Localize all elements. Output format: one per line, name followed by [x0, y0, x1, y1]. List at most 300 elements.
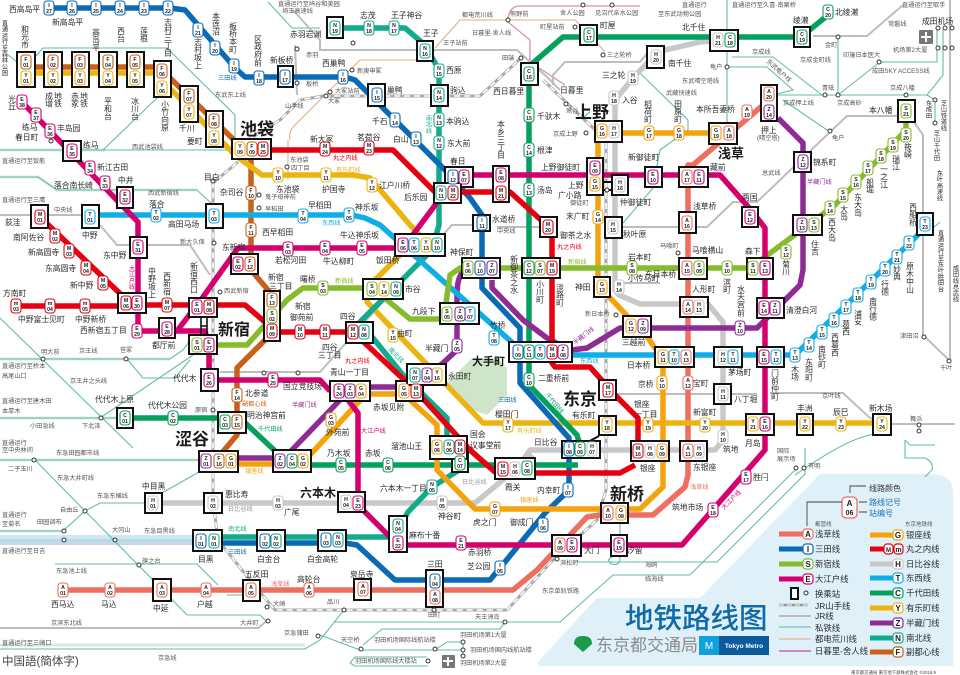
- small labels: railways and through services: 至中央林间: [2, 446, 33, 454]
- stations: Asakusa line: A: [685, 263, 689, 269]
- stations: Ginza line: 19: [713, 134, 719, 140]
- small labels: railways and through services: 四丁目: [291, 165, 310, 172]
- stations: Fukutoshin line: F: [249, 188, 253, 194]
- station labels: horizontal: 三之轮: [602, 70, 626, 80]
- stations: Tozai line: 05: [346, 216, 352, 222]
- small labels: railways and through services: 都电荒川线: [462, 11, 493, 19]
- station labels: vertical: 芝山铁道线: [940, 99, 947, 131]
- stations: Yurakucho line: 01: [23, 79, 29, 85]
- stations: Fukutoshin line: F: [160, 66, 164, 72]
- stations: Yurakucho line: 23: [838, 425, 844, 431]
- stations: Namboku line: N: [362, 327, 366, 333]
- station labels: horizontal: 东大前: [447, 138, 471, 148]
- stations: Chiyoda line: 17: [586, 36, 592, 42]
- station labels: horizontal: 北千住: [682, 22, 706, 32]
- stations: Fukutoshin line: F: [249, 225, 253, 231]
- stations: Namboku line: N: [437, 90, 441, 96]
- small labels: railways and through services: 莺谷: [566, 107, 578, 115]
- station labels: horizontal: 北绫濑: [835, 7, 859, 17]
- station labels: horizontal: 新宿: [295, 301, 311, 311]
- station labels: horizontal: 清澄白河: [786, 305, 817, 315]
- stations: Namboku line: N: [396, 521, 400, 527]
- stations: Asakusa line: A: [685, 218, 689, 224]
- small labels: railways and through services: 鬼子母神前: [265, 193, 296, 201]
- legend key labels: 东京地铁线: [905, 520, 933, 528]
- stations: Marunouchi line: m: [48, 301, 53, 307]
- stations: Namboku line: N: [439, 188, 443, 194]
- stations: Chiyoda line: C: [527, 263, 531, 269]
- stations: Asakusa line: A: [108, 585, 112, 591]
- small labels: railways and through services: 京成八幡: [890, 84, 915, 92]
- station labels: horizontal: 町屋: [600, 21, 616, 30]
- stations: Tozai line: T: [807, 340, 811, 346]
- small labels: railways and through services: 大江户线: [720, 488, 743, 511]
- stations: Tozai line: 17: [843, 308, 849, 314]
- stations: Tozai line: T: [883, 264, 887, 270]
- stations: Tozai line: 18: [855, 296, 861, 302]
- stations: Oedo line: 12: [747, 218, 753, 224]
- small labels: railways and through services: 大崎: [273, 600, 285, 608]
- stations: Mita line: I: [95, 3, 97, 9]
- stations: Shinjuku line: S: [697, 263, 701, 269]
- stations: Ginza line: 17: [646, 134, 652, 140]
- small labels: railways and through services: 东京单轨铁路: [542, 587, 580, 595]
- station labels: horizontal: 御茶之水: [560, 230, 591, 240]
- stations: Oedo line: 02: [235, 265, 241, 271]
- stations: Marunouchi line: 04: [83, 269, 89, 275]
- stations: Ginza line: 06: [434, 448, 440, 454]
- small labels: railways and through services: 银座线: [520, 496, 539, 504]
- station labels: vertical: 地铁: [79, 91, 88, 109]
- station labels: horizontal: 新高圆寺: [28, 247, 59, 257]
- small labels: railways and through services: 西武池袋线: [132, 143, 163, 151]
- stations: Fukutoshin line: 04: [105, 63, 111, 69]
- stations: Oedo line: 15: [761, 358, 767, 364]
- station labels: horizontal: 银座: [634, 399, 650, 409]
- legend letter badges: S: [805, 560, 811, 569]
- stations: Fukutoshin line: 16: [216, 462, 222, 468]
- station labels: horizontal: 白金高轮: [307, 554, 338, 564]
- stations: Fukutoshin line: 10: [248, 194, 254, 200]
- station labels: horizontal: 日本桥: [627, 360, 651, 370]
- stations: Yurakucho line: 09: [237, 150, 243, 156]
- stations: Namboku line: N: [437, 66, 441, 72]
- station labels: horizontal: 水道桥: [492, 214, 516, 224]
- station labels: horizontal: 四谷: [340, 312, 356, 321]
- stations: Mita line: I: [214, 43, 216, 49]
- station labels: horizontal: 杂司谷: [220, 188, 244, 197]
- station labels: vertical: 稻荷町: [643, 99, 652, 123]
- stations: Fukutoshin line: F: [106, 57, 110, 63]
- stations: Yurakucho line: Y: [803, 419, 807, 425]
- stations: Ginza line: G: [329, 415, 333, 421]
- stations: Tozai line: 19: [868, 283, 874, 289]
- small labels: railways and through services: 直通运行至饭能: [2, 157, 45, 165]
- stations: Mita line: I: [48, 3, 50, 9]
- station labels: vertical: 志村三丁目: [163, 17, 172, 58]
- stations: Oedo line: E: [135, 298, 139, 304]
- station labels: vertical: 东阳町: [804, 357, 814, 381]
- stations: Mita line: 09: [515, 353, 521, 359]
- stations: Tozai line: T: [907, 238, 911, 244]
- stations: Asakusa line: A: [767, 89, 771, 95]
- station labels: horizontal: 中井: [118, 175, 134, 185]
- stations: Hanzomon line: Z: [425, 370, 429, 376]
- stations: Tozai line: T: [820, 327, 824, 333]
- icon: airport north: [919, 30, 933, 44]
- station labels: horizontal: 中延: [153, 603, 169, 613]
- stations: Marunouchi line: M: [270, 326, 274, 332]
- stations: Tozai line: 14: [806, 346, 812, 352]
- stations: Asakusa line: 09: [557, 546, 563, 552]
- stations: Oedo line: 17: [743, 478, 749, 484]
- stations: Chiyoda line: 03: [222, 423, 228, 429]
- stations: Asakusa line: A: [686, 302, 690, 308]
- stations: Ginza line: 09: [659, 452, 665, 458]
- stations: Chiyoda line: 07: [457, 464, 463, 470]
- station labels: horizontal: 森下: [745, 246, 761, 256]
- stations: Mita line: 02: [262, 542, 268, 548]
- stations: Hanzomon line: 02: [277, 462, 283, 468]
- stations: Fukutoshin line: [21, 55, 277, 468]
- station labels: horizontal: 王子神谷: [391, 10, 422, 20]
- station labels: horizontal: 都厅前: [152, 340, 176, 350]
- station labels: horizontal: 外苑前: [326, 427, 350, 437]
- legend swatches: [779, 534, 895, 652]
- station labels: horizontal: 西马込: [51, 600, 75, 609]
- station labels: vertical: 船堀: [865, 177, 874, 195]
- stations: Ginza line: G: [301, 456, 305, 462]
- subway line: Shinjuku: [217, 110, 906, 345]
- stations: Fukutoshin line: F: [24, 57, 28, 63]
- small labels: railways and through services: 直通运行至桥本: [2, 362, 45, 370]
- stations: Mita line: 16: [340, 78, 346, 84]
- stations: Hibiya line: 21: [715, 41, 721, 47]
- small labels: railways and through services: 武藏快速线: [666, 89, 697, 97]
- stations: Chiyoda line: C: [527, 110, 531, 116]
- small labels: railways and through services: 直通运行至三崎口: [2, 639, 52, 647]
- station labels: vertical: 赤冢: [70, 92, 80, 108]
- stations: Oedo line: 20: [569, 546, 575, 552]
- small labels: railways and through services: (晴空塔): [757, 134, 780, 142]
- station labels: horizontal: 虎之门: [473, 517, 497, 527]
- legend line names: 有乐町线: [906, 603, 940, 613]
- stations: Oedo line: 38: [19, 103, 25, 109]
- stations: Ginza line: 18: [676, 134, 682, 140]
- stations: Marunouchi line: M: [84, 263, 88, 269]
- station labels: vertical: 南行德: [868, 296, 878, 321]
- station labels: horizontal: 高轮台: [297, 574, 321, 584]
- stations: Hibiya line: [148, 33, 728, 510]
- stations: Shinjuku line: 05: [444, 315, 450, 321]
- stations: Asakusa line: 15: [684, 269, 690, 275]
- small labels: railways and through services: 板桥: [306, 80, 318, 88]
- stations: Hibiya line: 17: [611, 132, 617, 138]
- stations: Tozai line: T: [412, 240, 416, 246]
- station labels: horizontal: 江户川桥: [379, 180, 410, 190]
- stations: Hanzomon line: 12: [800, 163, 806, 169]
- stations: Namboku line: N: [336, 535, 340, 541]
- small labels: railways and through services: 京成金町线: [800, 56, 831, 64]
- stations: Hanzomon line: 08: [560, 353, 566, 359]
- small labels: railways and through services: 千叶: [940, 364, 952, 372]
- stations: Asakusa line: 01: [60, 591, 66, 597]
- subway line: Mita: [50, 8, 569, 580]
- stations: Chiyoda line: C: [587, 30, 591, 36]
- stations: Ginza line: G: [435, 442, 439, 448]
- stations: Tozai line: 02: [153, 216, 159, 222]
- stations: Shinjuku line: 17: [865, 169, 871, 175]
- stations: Fukutoshin line: 15: [234, 423, 240, 429]
- small labels: railways and through services: 丸之内线: [557, 243, 582, 251]
- stations: Yurakucho line: Y: [187, 107, 191, 113]
- station labels: horizontal: 巢鸭: [387, 85, 403, 95]
- station labels: vertical: 淡路町: [555, 283, 564, 306]
- stations: Namboku line: N: [333, 23, 337, 29]
- station labels: horizontal: 仲御徒町: [620, 197, 651, 207]
- small labels: railways and through services: 三田线: [498, 396, 517, 404]
- stations: Hibiya line: 02: [210, 504, 216, 510]
- stations: Marunouchi line: M: [323, 327, 327, 333]
- stations: Ginza line: 14: [595, 218, 601, 224]
- small labels: railways and through services: 常磐线: [888, 20, 907, 28]
- station labels: horizontal: 汐留: [627, 545, 643, 555]
- station labels: vertical: 和光市: [20, 25, 30, 49]
- stations: Hibiya line: H: [151, 498, 155, 504]
- small labels: railways and through services: 半藏门线: [292, 401, 317, 409]
- stations: Asakusa line: A: [361, 584, 365, 590]
- stations: Marunouchi line: 23: [366, 149, 372, 155]
- stations: Yurakucho line: 06: [159, 89, 165, 95]
- stations: Yurakucho line: Y: [605, 420, 609, 426]
- stations: Marunouchi line: M: [550, 263, 554, 269]
- stations: Tozai line: T: [468, 309, 472, 315]
- stations: Namboku line: 18: [366, 29, 372, 35]
- legend letter badges: m: [895, 547, 902, 554]
- station labels: horizontal: 大门: [584, 545, 600, 555]
- station labels: vertical: 东叶高速线: [936, 169, 943, 201]
- stations: Chiyoda line: [120, 5, 833, 475]
- station labels: horizontal: 二重桥前: [538, 373, 569, 383]
- small labels: railways and through services: 千代田线: [543, 391, 566, 415]
- small labels: railways and through services: 京急线: [158, 654, 177, 662]
- stations: Tozai line: T: [844, 302, 848, 308]
- station labels: horizontal: 东新宿: [222, 242, 246, 252]
- stations: Oedo line: 23: [355, 504, 361, 510]
- stations: Oedo line: E: [323, 243, 327, 249]
- small labels: railways and through services: 副都心线: [242, 400, 267, 408]
- stations: Marunouchi line: M: [67, 246, 71, 252]
- stations: Shinjuku line: S: [751, 263, 755, 269]
- stations: Mita line: I: [542, 520, 544, 526]
- station labels: horizontal: 浅草桥: [693, 201, 717, 211]
- stations: Fukutoshin line: 07: [186, 97, 192, 103]
- station labels: horizontal: 荻洼: [5, 217, 21, 227]
- small labels: railways and through services: 直通运行: [682, 1, 707, 9]
- stations: Mita line: I: [200, 536, 202, 542]
- stations: Yurakucho line: 21: [750, 425, 756, 431]
- stations: Marunouchi line: M: [501, 464, 505, 470]
- small labels: railways and through services: 天空桥: [341, 636, 360, 644]
- subway line: Asakusa: [63, 100, 769, 590]
- station labels: horizontal: 西新宿五丁目: [80, 325, 127, 335]
- legend letter badges: F: [896, 648, 901, 657]
- station labels: horizontal: 神田: [575, 282, 591, 292]
- stations: Chiyoda line: C: [525, 463, 529, 469]
- stations: Namboku line: N: [435, 240, 439, 246]
- small labels: railways and through services: 千代田线: [258, 425, 283, 433]
- stations: Shinjuku line: 02: [269, 317, 275, 323]
- station labels: horizontal: 五反田: [245, 569, 269, 579]
- station labels: horizontal: 人形町: [692, 285, 716, 294]
- legend line names: 丸之内线: [906, 544, 940, 554]
- small labels: railways and through services: 三田线: [218, 74, 237, 82]
- stations: Asakusa line: 17: [684, 178, 690, 184]
- stations: Marunouchi line: M: [53, 231, 57, 237]
- station labels: vertical: 南北线: [424, 114, 432, 134]
- stations: Tozai line: T: [154, 210, 158, 216]
- stations: Tozai line: T: [923, 219, 927, 225]
- stations: Hibiya line: H: [440, 498, 444, 504]
- stations: Marunouchi line: M: [351, 327, 355, 333]
- stations: Oedo line: E: [711, 505, 715, 511]
- stations: Marunouchi line: 25: [260, 150, 266, 156]
- stations: Hanzomon line: 03: [347, 392, 353, 398]
- stations: Ginza line: G: [596, 212, 600, 218]
- stations: Fukutoshin line: 08: [211, 122, 217, 128]
- stations: Tozai line: T: [538, 347, 542, 353]
- stations: Oedo line: 19: [616, 546, 622, 552]
- station labels: horizontal: 千川: [179, 123, 195, 133]
- subway line: Ginza: [238, 133, 718, 509]
- stations: Chiyoda line: 14: [526, 151, 532, 157]
- small labels: railways and through services: 丸之内线: [345, 357, 370, 365]
- stations: Asakusa line: 11: [685, 452, 691, 458]
- stations: Yurakucho line: 20: [702, 426, 708, 432]
- stations: Tozai line: 11: [730, 358, 736, 364]
- stations: Mita line: [44, 1, 574, 588]
- stations: Yurakucho line: Y: [276, 170, 280, 176]
- stations: Hanzomon line: Z: [348, 386, 352, 392]
- stations: Oedo line: E: [34, 110, 38, 116]
- stations: Shinjuku line: 08: [629, 269, 635, 275]
- stations: Hibiya line: 10: [720, 438, 726, 444]
- small labels: railways and through services: 东西线: [580, 357, 599, 365]
- stations: Asakusa line: 03: [159, 591, 165, 597]
- stations: Marunouchi line: M: [124, 298, 128, 304]
- stations: Oedo line: E: [286, 244, 290, 250]
- stations: Hibiya line: 01: [150, 504, 156, 510]
- station labels: horizontal: 新御徒町: [628, 152, 659, 162]
- stations: Yurakucho line: 19: [645, 426, 651, 432]
- stations: Yurakucho line: Y: [370, 180, 374, 186]
- stations: Tozai line: 21: [894, 258, 900, 264]
- small labels: railways and through services: 新宿线: [568, 258, 587, 266]
- station labels: horizontal: 一丁目: [634, 410, 657, 419]
- legend key pill: A: [847, 499, 853, 508]
- station labels: vertical: 大江户线: [128, 264, 135, 290]
- stations: Shinjuku line: 10: [724, 269, 730, 275]
- stations: Mita line: 15: [374, 96, 380, 102]
- stations: Ginza line: 12: [628, 327, 634, 333]
- legend line names: 半藏门线: [906, 618, 940, 628]
- station labels: horizontal: 牛込柳町: [323, 256, 354, 266]
- stations: Marunouchi line: 02: [52, 237, 58, 243]
- station labels: horizontal: 岩本町: [628, 252, 652, 262]
- stations: Asakusa line: 08: [432, 598, 438, 604]
- legend line keys: [779, 588, 811, 651]
- legend key labels: [815, 483, 933, 528]
- stations: Marunouchi line: 11: [322, 333, 328, 339]
- station labels: vertical: 本莲沼: [211, 11, 220, 36]
- stations: Hibiya line: H: [654, 52, 658, 58]
- major station names: 池袋: [240, 120, 274, 139]
- stations: Asakusa line: A: [686, 378, 690, 384]
- stations: Chiyoda line: C: [826, 7, 830, 13]
- station labels: vertical: 木场: [790, 364, 800, 382]
- stations: Mita line: I: [394, 115, 396, 121]
- small labels: railways and through services: 银座线: [245, 467, 264, 475]
- stations: Asakusa line: 02: [107, 591, 113, 597]
- station labels: horizontal: 筑地: [723, 444, 739, 454]
- stations: Marunouchi line: M: [451, 188, 455, 194]
- stations: Namboku line: 16: [422, 52, 428, 58]
- stations: Mita line: 19: [231, 67, 237, 73]
- station labels: horizontal: 根津: [537, 145, 553, 155]
- subway line: Namboku: [215, 28, 459, 537]
- stations: Ginza line: G: [593, 179, 597, 185]
- small labels: railways and through services: 大井町: [240, 619, 259, 627]
- stations: Ginza line: G: [619, 508, 623, 514]
- station labels: horizontal: 若松河田: [275, 255, 306, 265]
- stations: Namboku line: 03: [335, 541, 341, 547]
- stations: Marunouchi line: 14: [457, 448, 463, 454]
- small labels: railways and through services: 田町: [428, 612, 440, 619]
- station labels: horizontal: 中野新桥: [75, 314, 106, 324]
- stations: Namboku line: 12: [436, 144, 442, 150]
- stations: Hanzomon line: Z: [455, 341, 459, 347]
- stations: Mita line: I: [434, 576, 436, 582]
- stations: Asakusa line: A: [433, 592, 437, 598]
- stations: Yurakucho line: Y: [839, 419, 843, 425]
- station labels: horizontal: 锦系町: [813, 157, 837, 167]
- stations: Hanzomon line: Z: [641, 321, 645, 327]
- stations: Namboku line: N: [212, 536, 216, 542]
- stations: Chiyoda line: 11: [526, 353, 532, 359]
- stations: Yurakucho line: Y: [324, 170, 328, 176]
- stations: Tozai line: [85, 208, 930, 364]
- stations: Tozai line: 01: [87, 218, 93, 224]
- stations: Chiyoda line: 20: [825, 13, 831, 19]
- stations: Yurakucho line: 03: [77, 79, 83, 85]
- major station names: 涩谷: [175, 430, 209, 449]
- subway line: Hibiya: [153, 40, 724, 503]
- station labels: horizontal: 茅场町: [728, 367, 752, 377]
- small labels: railways and through services: 田园调布: [37, 518, 62, 526]
- stations: Oedo line: E: [136, 242, 140, 248]
- stations: Tozai line: 16: [831, 321, 837, 327]
- legend line names: 三田线: [815, 544, 841, 554]
- stations: Mita line: 27: [46, 9, 52, 15]
- stations: Hibiya line: 16: [617, 186, 623, 192]
- legend line names: 东西线: [906, 573, 932, 583]
- stations: Yurakucho line: 08: [211, 139, 217, 145]
- stations: Fukutoshin line: 01: [23, 63, 29, 69]
- stations: Mita line: I: [568, 444, 570, 450]
- stations: Asakusa line: 18: [726, 134, 732, 140]
- stations: Marunouchi line: 13: [413, 392, 419, 398]
- stations: Ginza line: G: [677, 128, 681, 134]
